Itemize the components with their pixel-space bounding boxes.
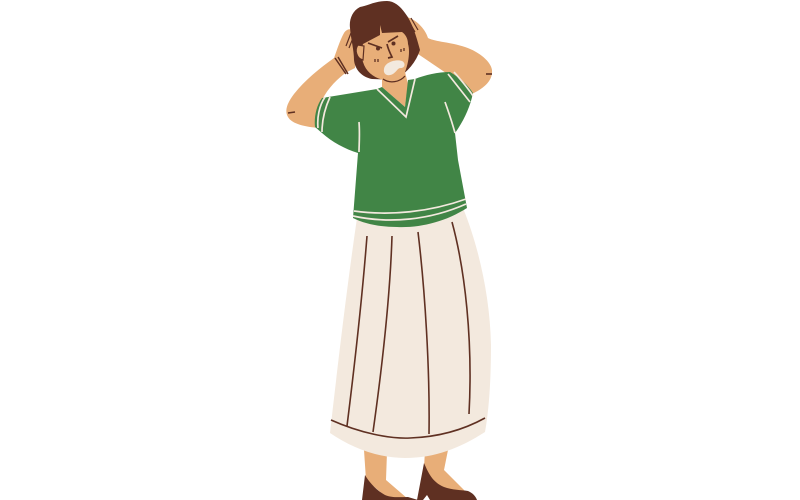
green shirt [315, 72, 473, 227]
mouth [384, 60, 405, 75]
elbow crease [288, 112, 295, 113]
cheek marks [375, 48, 404, 62]
finger lines [408, 18, 418, 32]
left arm and hand [286, 29, 356, 128]
ear [356, 45, 364, 60]
neck [382, 72, 408, 107]
legs [364, 450, 465, 500]
elbow crease [486, 73, 492, 75]
chin line [383, 76, 405, 82]
finger lines [346, 33, 353, 48]
shirt trim lines [318, 72, 473, 220]
face [356, 25, 409, 82]
figure [286, 1, 492, 500]
eyebrows and nose [368, 36, 398, 58]
hair back [350, 1, 420, 80]
right arm and hand [407, 17, 492, 94]
eyes [376, 46, 380, 50]
skirt pleats and hem line [331, 222, 485, 438]
skirt [330, 208, 491, 458]
bracelets [335, 57, 348, 74]
shoes [362, 463, 477, 500]
